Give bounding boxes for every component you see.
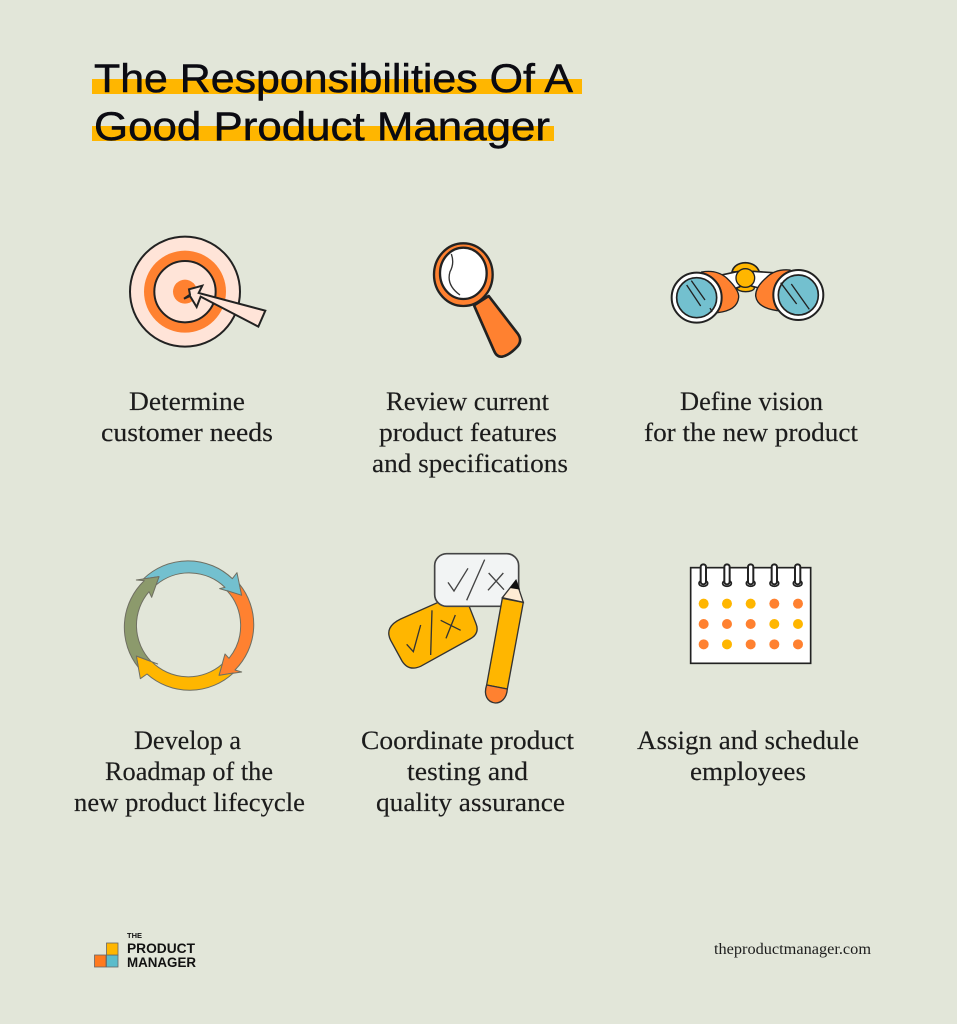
label: develop a roadmap: Develop a [134, 726, 241, 755]
icon: checklist cards and pencil [389, 554, 523, 703]
label: determine customer needs [101, 387, 273, 447]
icon: cycle of four arrows [124, 561, 254, 690]
label: define vision: Define vision [680, 387, 823, 416]
label: coordinate product testing [361, 726, 575, 817]
label: assign and schedule employees [637, 726, 859, 786]
logo: The Product Manager: MANAGER [127, 955, 196, 970]
logo: The Product Manager [94, 933, 196, 970]
icon: binoculars [672, 263, 823, 323]
logo: The Product Manager: PRODUCT [127, 941, 196, 956]
panel: define vision [644, 263, 859, 447]
icon: magnifying glass [434, 243, 520, 357]
panel: develop a roadmap [74, 561, 305, 817]
label: review current product features [372, 387, 568, 478]
label: assign and schedule employees: employees [690, 757, 806, 786]
label: review current product features: and specifications [372, 449, 568, 478]
label: define vision [644, 387, 859, 447]
label: assign and schedule employees: Assign and schedule [637, 726, 859, 755]
title: Good Product Manager [94, 105, 550, 149]
panel: assign and schedule employees [637, 564, 859, 786]
title: The Responsibilities Of A [94, 57, 573, 101]
label: coordinate product testing: Coordinate product [361, 726, 575, 755]
label: coordinate product testing: quality assurance [376, 788, 565, 817]
logo: The Product Manager: THE [127, 933, 142, 940]
label: develop a roadmap: Roadmap of the [105, 757, 273, 786]
label: define vision: for the new product [644, 418, 859, 447]
website url: theproductmanager.com [714, 941, 871, 958]
label: determine customer needs: Determine [129, 387, 245, 416]
panel: review current product features [372, 243, 568, 478]
icon: target with arrow [130, 237, 265, 347]
label: determine customer needs: customer needs [101, 418, 273, 447]
title [92, 57, 582, 149]
panel: coordinate product testing [361, 554, 575, 817]
label: review current product features: product features [379, 418, 557, 447]
label: review current product features: Review current [386, 387, 550, 416]
icon: calendar [691, 564, 811, 663]
label: coordinate product testing: testing and [407, 757, 528, 786]
label: develop a roadmap [74, 726, 305, 817]
label: develop a roadmap: new product lifecycle [74, 788, 305, 817]
panel: determine customer needs [101, 237, 273, 447]
